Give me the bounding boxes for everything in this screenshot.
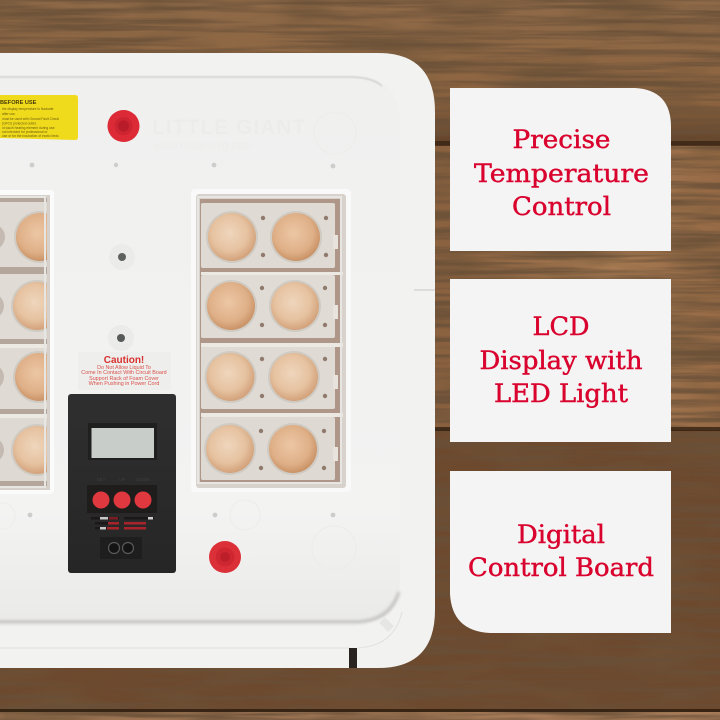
warning label: before use: (GFCI) protected outlet. — [2, 122, 37, 126]
screw: upper — [109, 244, 135, 270]
button labels: UP — [119, 477, 125, 482]
lcd display — [88, 423, 157, 460]
warning label: before use: BEFORE USE — [0, 100, 37, 106]
mounting holes — [28, 163, 335, 517]
card: lcd display with led light — [450, 279, 671, 442]
caution label: Caution! — [104, 355, 144, 366]
button labels — [97, 477, 150, 482]
molded circles — [0, 112, 356, 570]
red plug: top — [108, 110, 140, 142]
button labels: DOWN — [136, 477, 150, 482]
card: lcd display with led light: Display with — [480, 346, 642, 375]
warning label: before use: after use. — [2, 112, 16, 116]
card: precise temperature control: Precise — [512, 125, 610, 154]
power socket — [100, 537, 142, 559]
tray row 3 — [201, 343, 343, 409]
warning label: before use: must be used with Ground Fault Circuit — [2, 117, 59, 121]
card: precise temperature control: Control — [512, 192, 611, 221]
window frame — [191, 189, 351, 492]
brand embossing: LITTLE GIANT — [152, 116, 306, 139]
card: digital control board — [450, 471, 671, 633]
left egg window — [0, 190, 54, 494]
card: precise temperature control: Temperature — [474, 159, 649, 188]
red plug: bottom — [209, 541, 241, 573]
incubator lid — [0, 53, 435, 668]
card: precise temperature control — [450, 88, 671, 251]
brand embossing — [152, 116, 306, 152]
card: digital control board: Digital — [517, 520, 605, 549]
brand embossing: www.miller-mfg.com — [153, 140, 252, 152]
right egg window — [191, 189, 351, 492]
lid outer rim — [0, 53, 435, 668]
control panel — [68, 394, 176, 573]
button labels: SET — [97, 477, 106, 482]
tray row 4 — [201, 413, 343, 480]
warning label: before use: the display temperature to fluctuate — [2, 107, 54, 111]
warning label: before use: not intended for professional or — [2, 130, 48, 134]
caution label: Do Not Allow Liquid To — [97, 365, 151, 371]
caution label: When Pushing in Power Cord — [89, 381, 159, 387]
caution label: Come In Contact With Circuit Board — [81, 370, 167, 376]
vent notch — [349, 648, 357, 668]
caution label — [78, 352, 171, 390]
card: lcd display with led light: LCD — [532, 312, 590, 341]
indicator lights — [91, 517, 154, 530]
caution label: Support Rack of Foam Cover — [89, 376, 159, 382]
tray row 1 — [201, 203, 335, 268]
warning label: before use: use or for the incubation of exotic birds — [2, 134, 59, 138]
tray row 2 — [201, 272, 343, 338]
warning label: before use: ot touch heating element during use. — [2, 126, 55, 130]
recessed top surface — [0, 77, 400, 622]
screw: lower — [108, 325, 134, 351]
red buttons — [87, 485, 157, 513]
card: digital control board: Control Board — [468, 553, 654, 582]
warning label: before use — [0, 95, 78, 140]
card: lcd display with led light: LED Light — [494, 379, 628, 408]
